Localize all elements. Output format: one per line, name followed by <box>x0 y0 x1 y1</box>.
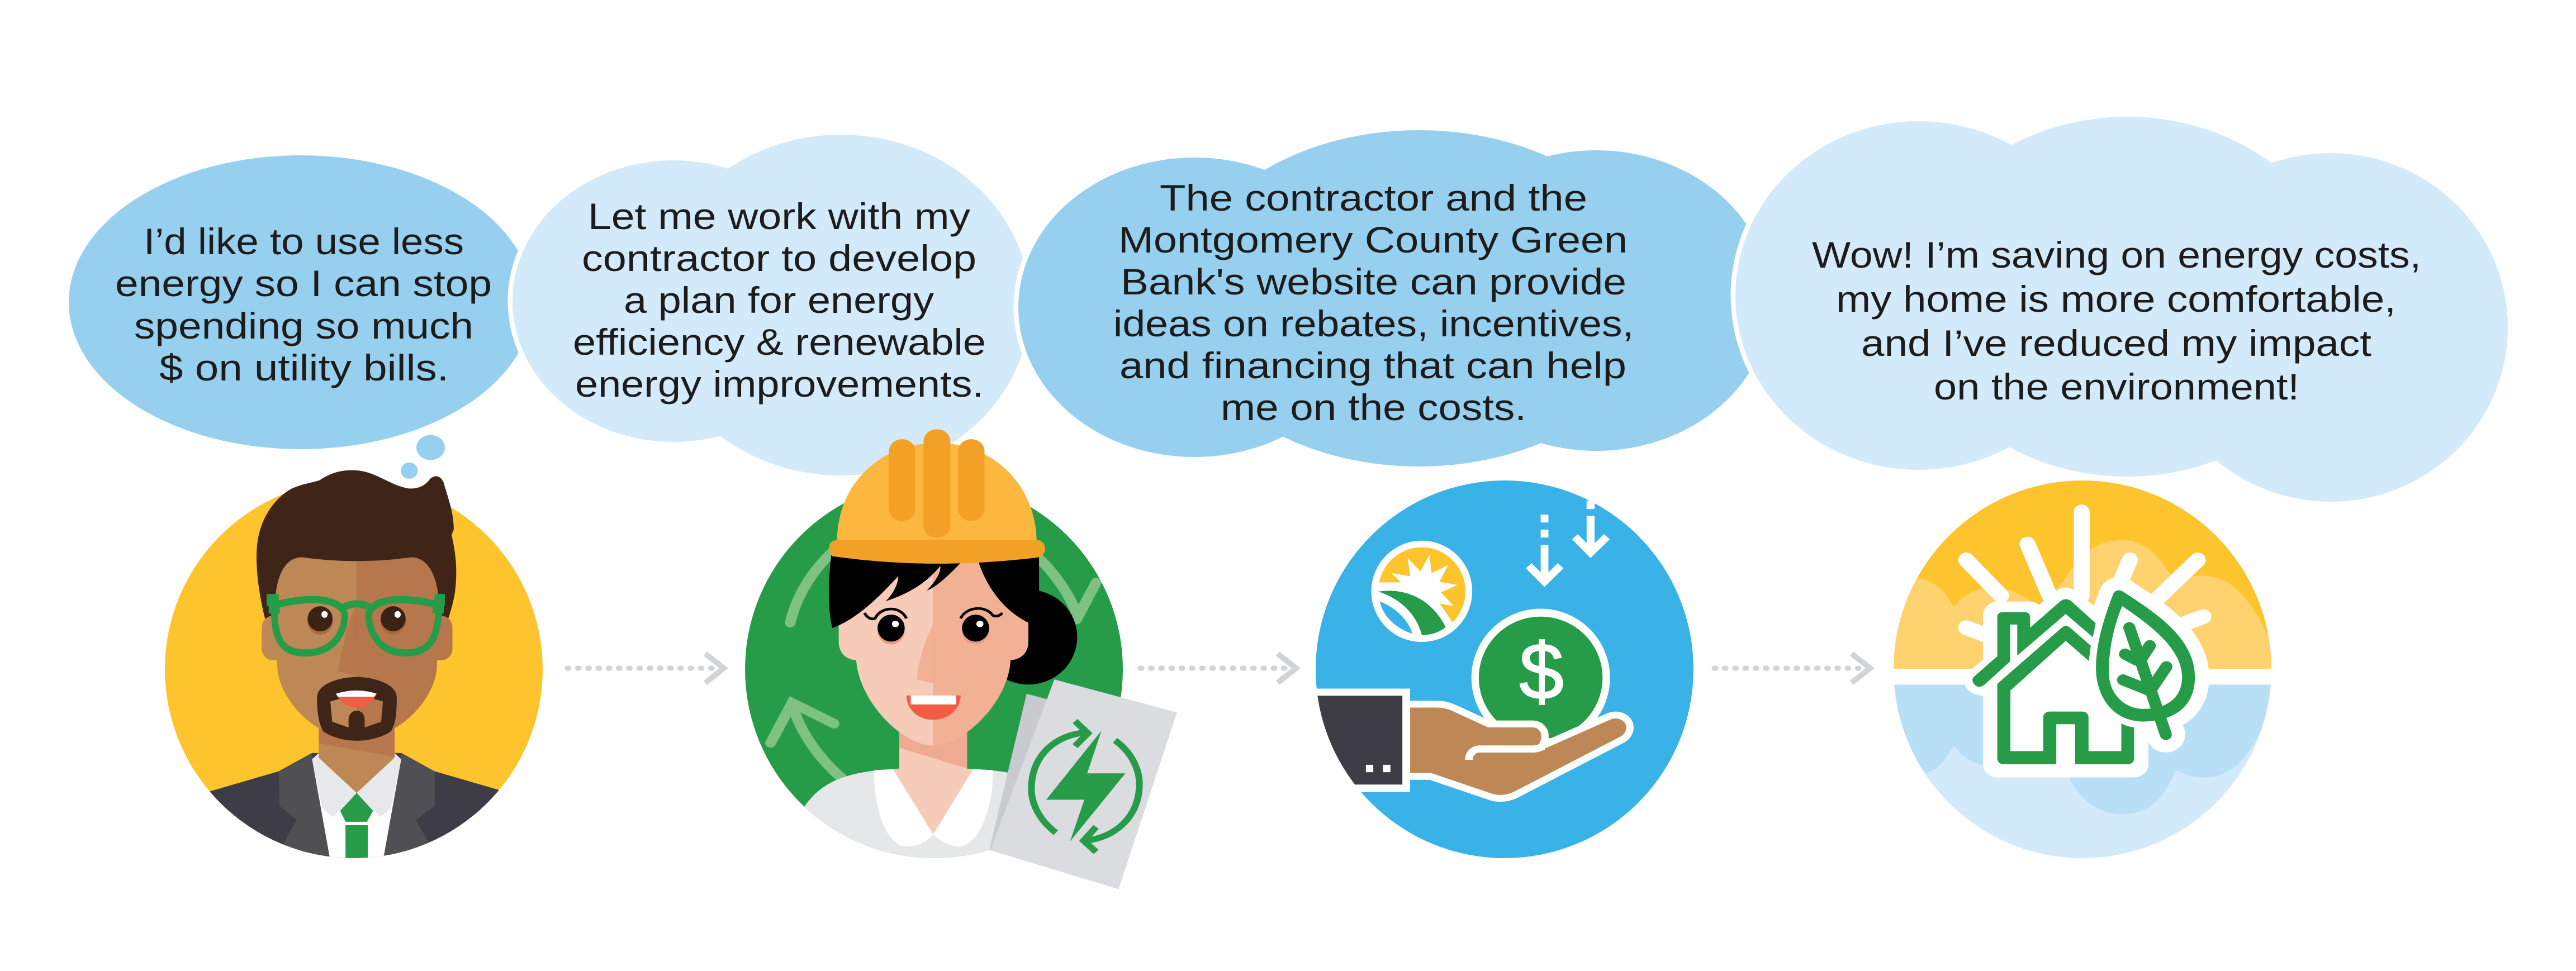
text: contractor speech: efficiency & renewable <box>573 321 986 363</box>
text: contractor speech: energy improvements. <box>575 363 984 404</box>
sun rays <box>1966 512 2203 636</box>
text: savings outcome: on the environment! <box>1934 366 2299 407</box>
hand <box>1403 689 1626 795</box>
thought bubbles <box>401 435 445 479</box>
hair front <box>829 555 1039 628</box>
eyes <box>307 606 406 635</box>
text: homeowner thought: spending so much <box>134 305 473 346</box>
neck <box>893 727 973 834</box>
text: green bank resources: me on the costs. <box>1221 387 1526 428</box>
dollar sign: $ <box>1519 627 1564 716</box>
speech bubble 2 <box>513 135 1030 475</box>
text: green bank resources: ideas on rebates, incentives, <box>1113 303 1634 344</box>
speech bubble 4 <box>1735 117 2508 502</box>
hard hat <box>829 429 1045 564</box>
icon: financing hand <box>1303 480 1693 858</box>
text: green bank resources: and financing that can help <box>1119 345 1626 386</box>
text: contractor speech <box>573 196 986 404</box>
house <box>1972 599 2134 764</box>
beard and mouth <box>317 677 397 741</box>
speech bubble 1 <box>69 155 533 449</box>
text: green bank resources: The contractor and the <box>1160 177 1587 218</box>
text: savings outcome: my home is more comfortable, <box>1836 278 2396 320</box>
text: green bank resources: Bank's website can provide <box>1121 261 1626 302</box>
white halo <box>1979 591 2195 764</box>
hair <box>257 470 456 645</box>
arrow: step 1 to 2 <box>567 654 724 683</box>
text: homeowner thought: I’d like to use less <box>144 221 464 262</box>
face <box>275 557 439 740</box>
text: homeowner thought: energy so I can stop <box>115 263 492 304</box>
text: homeowner thought: $ on utility bills. <box>159 347 449 388</box>
arrow: step 2 to 3 <box>1140 654 1296 683</box>
cuff <box>1317 688 1410 792</box>
water clouds <box>1890 684 2275 815</box>
mouth <box>907 696 961 720</box>
falling arrows <box>1541 501 1595 579</box>
light sky clouds <box>1890 540 2275 669</box>
text: contractor speech: Let me work with my <box>588 196 970 237</box>
text: contractor speech: a plan for energy <box>624 279 934 321</box>
energy document <box>989 679 1177 889</box>
glasses <box>267 599 445 653</box>
leaf <box>2096 591 2195 735</box>
text: green bank resources: Montgomery County Green <box>1118 219 1628 260</box>
text: green bank resources <box>1113 177 1634 428</box>
hair bun <box>980 589 1077 684</box>
blouse <box>804 769 1008 858</box>
text: contractor speech: contractor to develop <box>582 237 976 279</box>
icon: homeowner portrait <box>165 435 543 871</box>
coin <box>1472 609 1610 747</box>
arrow: step 3 to 4 <box>1714 654 1870 683</box>
face <box>839 560 1028 745</box>
text: savings outcome: and I’ve reduced my impact <box>1861 322 2371 364</box>
icon: green home <box>1889 475 2280 865</box>
eyes <box>865 608 1002 645</box>
logo: sun and field <box>1368 541 1474 648</box>
recycling arrows <box>771 550 1096 778</box>
text: savings outcome <box>1812 234 2421 407</box>
text: homeowner thought <box>115 221 492 388</box>
speech bubble 3 <box>1018 130 1771 467</box>
ears <box>262 616 453 660</box>
icon: contractor portrait <box>745 429 1177 889</box>
text: savings outcome: Wow! I’m saving on energy costs, <box>1812 234 2421 275</box>
